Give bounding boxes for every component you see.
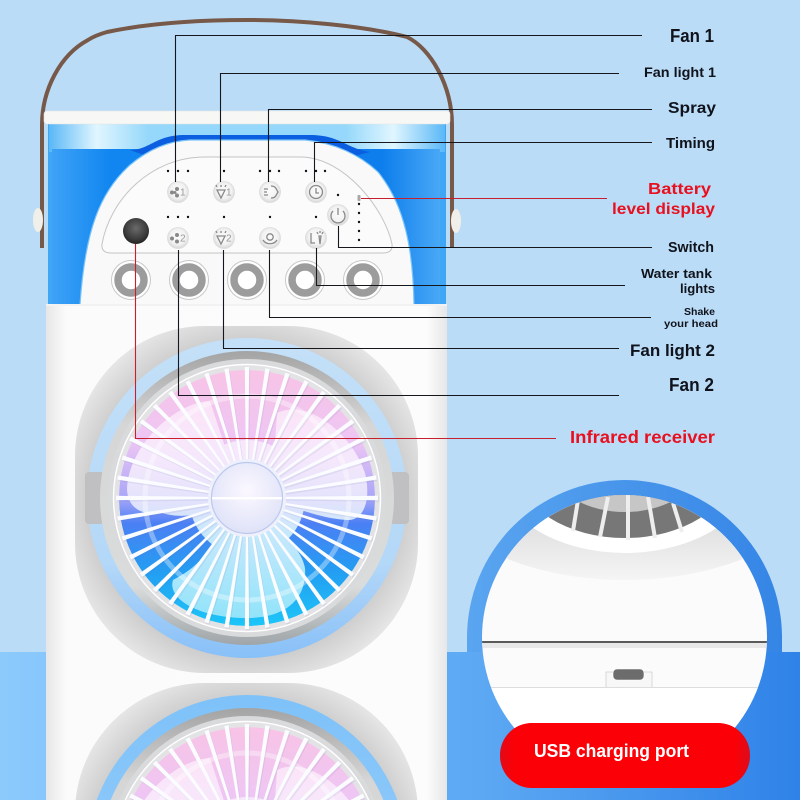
shaded recess [506, 495, 744, 574]
panel outline [102, 157, 392, 253]
USB charging port label: USB charging port [534, 741, 689, 761]
label: Shake your head [664, 306, 718, 330]
fan 2 recess [75, 683, 418, 800]
indicator dots [167, 170, 360, 241]
label: Fan 2: Fan 2 [669, 375, 714, 395]
carry handle [42, 20, 452, 248]
base line [480, 687, 770, 688]
leader line: timing [314, 142, 652, 182]
button: water tank lights [306, 228, 326, 248]
label: Shake your head: Shake [684, 306, 715, 318]
fan 1 grille [100, 351, 394, 645]
body lower seam [46, 304, 447, 306]
leader line: battery [361, 198, 607, 200]
inset: blue ring [467, 480, 782, 652]
leader line: shake head [270, 250, 651, 318]
fan 1 left pivot [85, 472, 105, 524]
button: fan 1: 1 [180, 188, 186, 198]
leader line: switch [338, 226, 652, 248]
label: Battery level display [612, 181, 715, 218]
label: Battery level display: Battery [648, 181, 711, 198]
button: fan light 1: 1 [226, 188, 232, 198]
USB port [613, 669, 644, 680]
leader line: water tank lights [316, 248, 625, 286]
button: timing [306, 182, 326, 202]
label: Fan light 2: Fan light 2 [630, 341, 715, 360]
battery indicator [358, 195, 360, 201]
button: fan light 1 [214, 182, 234, 202]
white arc [534, 495, 716, 553]
seam line [480, 641, 770, 643]
leader line: fan 1 [176, 36, 642, 182]
button: shake head [260, 228, 280, 248]
button: power switch [328, 204, 348, 226]
leader line: fan 2 [178, 250, 619, 396]
label: Fan 1: Fan 1 [670, 26, 714, 46]
port tab [606, 672, 652, 687]
background: darker blue floor band [0, 652, 800, 800]
fan 2 blue ring [87, 695, 407, 800]
leader line: fan light 2 [224, 250, 619, 348]
label: Battery level display: level display [612, 201, 715, 218]
label: Water tank lights: Water tank [641, 267, 712, 281]
main white body [46, 304, 447, 800]
button: fan 2: 2 [180, 234, 186, 244]
label: Timing: Timing [666, 135, 715, 152]
fan 2 grille [100, 708, 394, 800]
left handle pivot [33, 208, 43, 232]
control panel [102, 157, 392, 253]
leader line: spray [268, 110, 652, 182]
water tank [48, 120, 446, 306]
button: fan 1 [168, 182, 188, 202]
button: fan light 2 [214, 228, 234, 248]
fan 1 blue ring [87, 338, 407, 658]
infrared receiver lens [123, 218, 149, 244]
label: Infrared receiver: Infrared receiver [570, 427, 715, 447]
inset: USB port close-up [482, 495, 767, 728]
fan 1 right pivot [389, 472, 409, 524]
button: spray [260, 182, 280, 202]
close-up fan grille [548, 495, 701, 540]
label: Water tank lights [641, 267, 715, 296]
leader line: infrared receiver [136, 244, 556, 438]
leader line: fan light 1 [220, 74, 619, 182]
label: Spray: Spray [668, 100, 716, 117]
tank lid [44, 111, 450, 124]
label: Switch: Switch [668, 240, 714, 256]
air outlet rings [112, 260, 382, 300]
USB charging port label [500, 723, 750, 788]
button: fan 2 [168, 228, 188, 248]
label: Shake your head: your head [664, 318, 718, 330]
right handle pivot [451, 209, 461, 233]
label: Water tank lights: lights [680, 282, 715, 296]
fan 1 recess [75, 326, 418, 673]
label: Fan light 1: Fan light 1 [644, 64, 716, 80]
button: fan light 2: 2 [226, 234, 232, 244]
white dome control housing [80, 140, 414, 305]
